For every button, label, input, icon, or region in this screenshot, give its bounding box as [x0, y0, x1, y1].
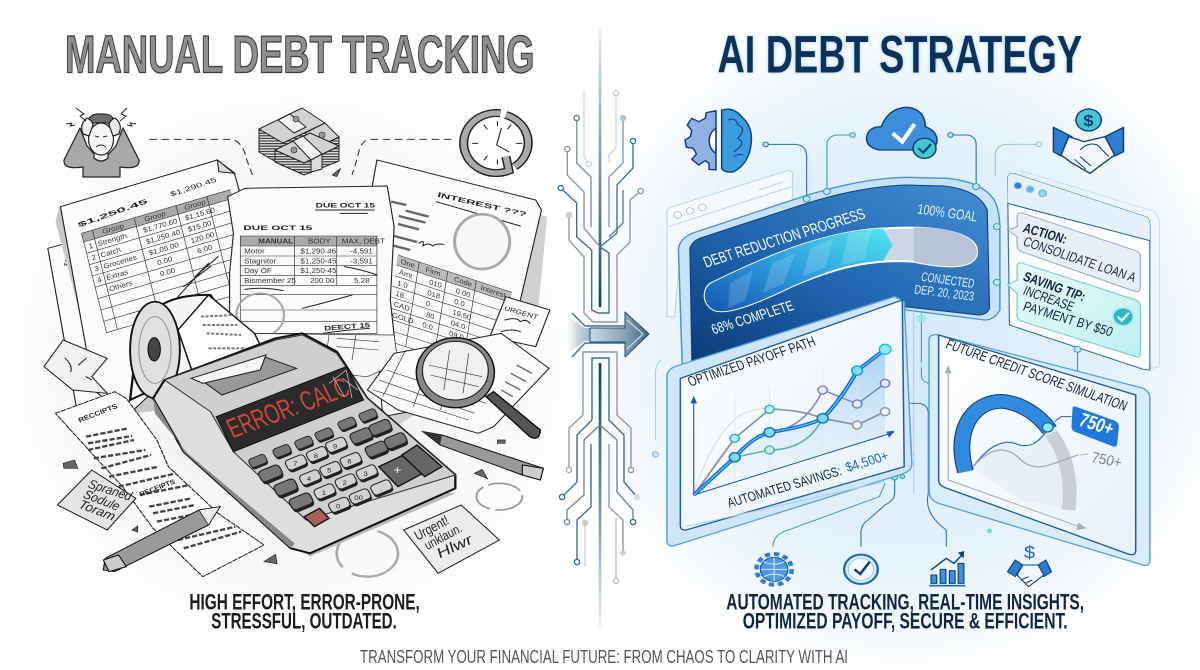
paper: left bill with table: Groop — [143, 209, 167, 224]
receipts strip: RECEIPTS — [138, 478, 177, 498]
icon: clock check — [844, 555, 878, 584]
icon: handshake with dollar — [1053, 109, 1123, 173]
calculator keypad: 0 — [336, 503, 340, 510]
calculator keypad: 8 — [314, 452, 318, 460]
panel: optimized payoff path — [667, 297, 912, 546]
paper: left bill with table: $1,250.45 — [76, 198, 149, 229]
callout: saving tip: INCREASE — [1020, 284, 1077, 315]
paper: left bill with table: Groop — [183, 197, 207, 212]
title: manual debt tracking: MANUAL DEBT TRACKING — [65, 26, 535, 85]
paper: right interest statement: 010 — [429, 278, 442, 290]
paper: due notice with table: $1,250-45 — [300, 257, 336, 265]
text: connected date: CONJECTED — [920, 270, 976, 291]
text: automated savings: AUTOMATED SAVINGS: — [725, 464, 844, 511]
note: sticky left — [57, 470, 136, 530]
icon: magnifying glass — [416, 338, 540, 438]
paper: right interest statement: One — [400, 257, 415, 270]
calculator keypad: 7 — [293, 460, 297, 468]
text: savings amount: $4,500+ — [843, 449, 891, 476]
paper: left bill with table: Strength — [97, 231, 128, 248]
paper: due notice with table: Day OF — [244, 266, 272, 275]
paper: left bill with table: 120.00 — [190, 230, 215, 245]
paper: left bill with table: $1,770.60 — [142, 217, 178, 235]
paper: right interest statement: 19.50 — [452, 308, 472, 322]
paper: right interest statement: Code — [453, 274, 473, 289]
arrow: dashed connector right — [352, 139, 452, 175]
icon: growth chart — [929, 551, 965, 586]
calculator keypad: 4 — [307, 475, 311, 483]
calculator keypad: 3 — [364, 470, 368, 478]
callout: saving tip: PAYMENT BY $50 — [1021, 299, 1115, 340]
paper: left bill with table: Catch — [100, 245, 122, 259]
paper: right interest statement: 0 — [425, 299, 431, 309]
calculator keypad: 9 — [333, 443, 337, 451]
icon: gear globe — [757, 554, 792, 585]
paper: due notice with table: Stagnitor — [244, 257, 277, 265]
paper: left bill with table: $1,290.45 — [169, 176, 218, 198]
connector lines center — [652, 310, 1081, 547]
coffee ring: bottom — [337, 530, 398, 577]
paper: papers under magnifier — [367, 333, 549, 433]
paper: far left sheet: $1, — [63, 257, 73, 267]
paper: right interest statement — [367, 160, 547, 433]
icon: handshake small — [1008, 543, 1052, 587]
note: urgent sticky: Hlwr — [434, 532, 477, 562]
paper: left bill with table: Others — [108, 278, 133, 293]
text: connected date: DEP. 20, 2023 — [913, 282, 975, 303]
paper: left bill with table: 0.00 — [159, 266, 176, 279]
text: 68 percent complete: 68% COMPLETE — [709, 298, 796, 338]
paper: due notice with table: Bismember 25 — [244, 276, 296, 285]
note: sticky left: Spraned — [86, 477, 134, 504]
paper: right interest statement: 0.00 — [455, 286, 471, 299]
callout: saving tip: SAVING TIP: — [1020, 270, 1088, 305]
calculator keypad: + — [393, 463, 401, 477]
paper: left bill with table: 4 — [96, 275, 103, 285]
circuit traces center — [558, 90, 643, 584]
chart: credit gauge — [945, 365, 1087, 530]
paper: right interest statement: 018 — [427, 288, 441, 301]
note: urgent slip — [490, 297, 550, 347]
paper: right interest statement: .80 — [423, 310, 435, 321]
window: back left — [667, 171, 792, 317]
chart: payoff lines — [690, 344, 895, 495]
note: urgent slip: URGENT — [503, 305, 540, 321]
paper: left bill with table: 0.00 — [156, 255, 173, 267]
paper: left bill with table: 6.00 — [196, 243, 213, 255]
icon: stressed person — [64, 108, 139, 177]
paper: due notice with table: -3,591 — [350, 257, 373, 265]
paper: left bill with table: Groceries — [103, 253, 138, 271]
panel: future credit score simulation — [929, 335, 1150, 565]
text: goal: 100% GOAL — [916, 201, 979, 225]
paper: due notice with table: $1,250-45 — [300, 266, 336, 275]
paper: due notice with table: MANUAL — [258, 237, 293, 245]
calculator keypad: 1 — [322, 489, 326, 497]
panel: debt reduction progress — [678, 177, 1000, 367]
icon: crumpled paper — [44, 340, 107, 393]
paper: left bill with table: 2 — [91, 253, 97, 262]
paper: due notice with table: 5.28 — [354, 276, 370, 285]
debris — [63, 168, 505, 564]
callout: saving tip — [1008, 263, 1140, 357]
paper: right interest statement: GOLD — [391, 310, 415, 326]
connector lines top — [763, 133, 1042, 198]
text: 750+ label: 750+ — [1090, 450, 1124, 471]
paper: left bill with table: 3 — [93, 264, 100, 273]
paper: due notice with table: -4,591 — [350, 247, 373, 256]
paper: left bill with table: Groop — [102, 221, 125, 236]
paper: due notice with table: MAX, DEBT — [342, 237, 385, 245]
calculator display — [216, 367, 364, 452]
paper: right interest statement: Firm — [425, 265, 441, 278]
footer caption: TRANSFORM YOUR FINANCIAL FUTURE: FROM CHAOS TO CLARITY WITH AI — [360, 647, 848, 667]
paper: right interest statement: 04.0 — [450, 318, 466, 331]
paper: due notice with table: $1,290.46 — [300, 247, 336, 256]
paper: left bill with table: 1 — [88, 241, 94, 251]
text: receipts heading: RECCIPTS — [77, 403, 119, 424]
text: due date large: DUE OCT 15 — [243, 224, 312, 232]
receipts strip — [55, 392, 264, 577]
paper: left bill with table — [55, 160, 256, 417]
paper: right interest statement: 09.0 — [448, 329, 464, 342]
text: chart title: OPTIMIZED PAYOFF PATH — [685, 334, 818, 390]
calculator keypad: . — [380, 485, 382, 493]
badge: 750+ — [1071, 406, 1119, 447]
text: connected date — [913, 270, 976, 303]
calculator keypad: 5 — [327, 467, 331, 475]
calculator keypad: 2 — [342, 479, 347, 487]
paper: right interest statement: 18 — [395, 289, 405, 300]
calculator keypad: 6 — [347, 458, 352, 466]
badge: 750+: 750+ — [1076, 409, 1117, 440]
paper: right interest statement: Interest — [480, 283, 507, 300]
note: sticky left: Sodule — [81, 487, 123, 514]
icon: broken clock — [464, 113, 528, 173]
icon: gear and brain — [685, 109, 751, 172]
calculator — [153, 333, 455, 557]
text: due date small: DUE OCT 15 — [316, 202, 375, 209]
paper: due notice with table — [228, 186, 398, 377]
coffee ring — [455, 214, 510, 269]
text: manual summary: STRESSFUL, OUTDATED. — [211, 610, 397, 634]
panel: action recommendations window — [993, 171, 1159, 370]
paper: left bill with table: $15.00 — [187, 219, 212, 234]
icon: handshake small: $ — [1024, 543, 1036, 562]
paper: far left sheet — [48, 242, 115, 440]
panel: ai debt strategy — [652, 26, 1159, 634]
center spine: top — [599, 27, 601, 307]
text: error calc: ERROR: CALC — [222, 372, 355, 444]
paper: due notice with table: Motor — [244, 247, 265, 256]
paper roll — [130, 295, 266, 400]
icon: money stacks — [259, 108, 339, 175]
paper: right interest statement: 1.0 — [397, 278, 408, 290]
paper: right interest statement: CAD — [393, 300, 411, 313]
text: interest heading: INTEREST ??? — [436, 191, 527, 218]
note: urgent sticky: Urgent! — [411, 514, 453, 544]
paper: left bill with table: Extras — [105, 267, 129, 282]
callout: action: ACTION: — [1021, 221, 1069, 247]
text: manual summary — [189, 591, 420, 634]
paper: left bill with table: $1,05.00 — [148, 240, 180, 257]
paper: right interest statement: 0.0 — [454, 297, 465, 309]
paper: left bill with table: $1,15.60 — [184, 206, 216, 223]
icon: handshake with dollar: $ — [1083, 111, 1094, 130]
calculator keypad: 00 — [354, 494, 363, 502]
note: sticky left: Toram — [76, 497, 118, 523]
panel: manual debt tracking — [44, 26, 550, 634]
note: urgent sticky — [404, 505, 499, 573]
note: urgent sticky: unklaun. — [421, 521, 465, 552]
coffee ring: floor — [476, 483, 522, 510]
progress bar — [705, 227, 977, 311]
paper: left bill with table: $1,250.40 — [145, 228, 181, 246]
text: manual summary: HIGH EFFORT, ERROR-PRONE, — [189, 591, 420, 615]
paper: due notice with table: 200.00 — [310, 276, 334, 285]
icon: cloud check — [867, 107, 937, 158]
center spine: bottom — [599, 363, 601, 628]
arrow: transformation — [563, 312, 649, 357]
icon: pencil left — [103, 507, 220, 572]
text: debt reduction progress: DEBT REDUCTION PROGRESS — [701, 206, 868, 271]
text: ai summary — [726, 591, 1084, 634]
callout: action — [1008, 213, 1140, 292]
arrow: dashed connector left — [149, 139, 253, 175]
callout: action: CONSOLIDATE LOAN A — [1021, 235, 1138, 286]
calculator keypad — [248, 408, 442, 527]
paper: due notice with table: BODY — [308, 237, 331, 245]
icon: pencil right — [423, 432, 543, 480]
paper: right interest statement: Amt — [398, 268, 414, 281]
text: recalled date: DEECT 15 — [324, 322, 370, 333]
paper: right interest statement: 0.0 — [422, 320, 433, 332]
